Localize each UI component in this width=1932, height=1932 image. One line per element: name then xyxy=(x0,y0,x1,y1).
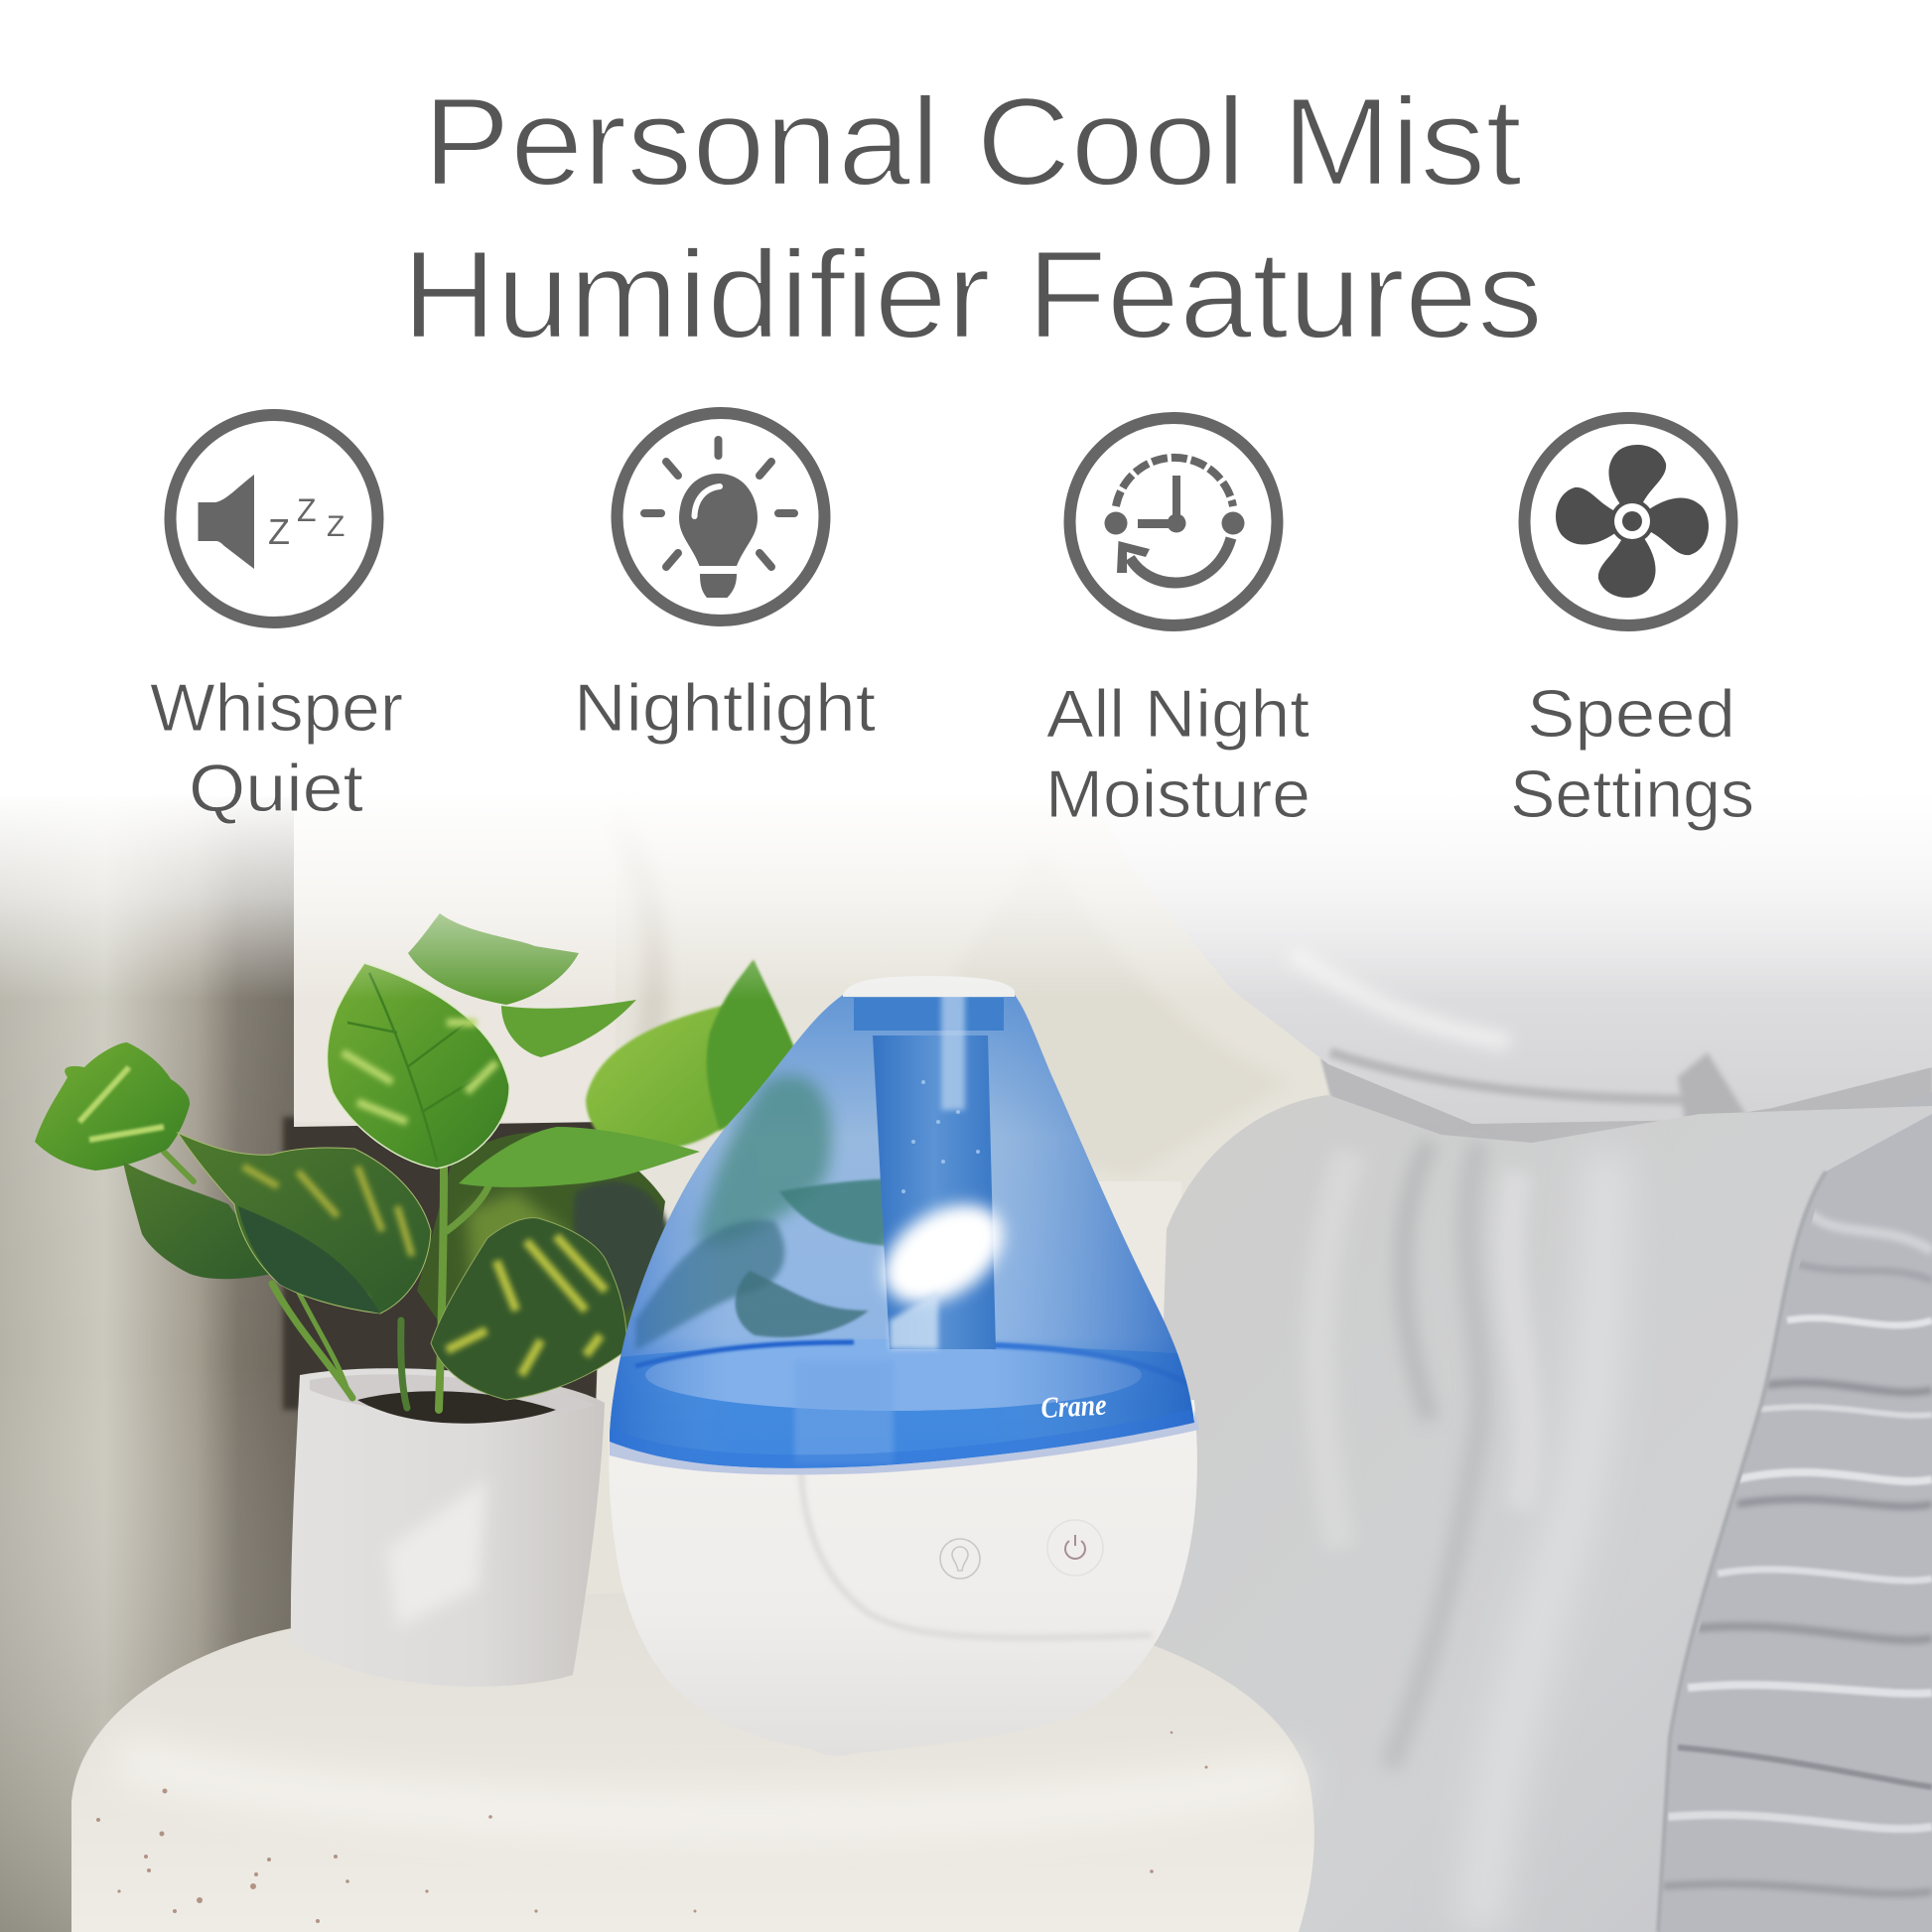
photo: bedside scene xyxy=(0,796,1932,1932)
title xyxy=(402,71,1543,364)
icon: speaker with zzz xyxy=(171,415,377,622)
leaf: bottom right variegated xyxy=(431,1218,626,1400)
dark leaf mass xyxy=(417,1132,665,1390)
tube xyxy=(873,1035,996,1349)
feature: whisper quiet xyxy=(150,415,403,826)
side shading xyxy=(610,1021,1194,1449)
leaf: mid bright horizontal xyxy=(459,1127,700,1187)
title: Humidifier Features xyxy=(402,224,1543,364)
leaf: back bright right xyxy=(586,960,794,1151)
nightlight button xyxy=(940,1539,980,1579)
blue tank xyxy=(596,991,1201,1474)
band at tank base xyxy=(606,1408,1196,1468)
droplets xyxy=(901,1080,980,1193)
label: speed settings: Speed xyxy=(1527,676,1735,752)
label: all night moisture: All Night xyxy=(1046,676,1310,752)
feature: all night moisture xyxy=(1045,418,1311,832)
white base xyxy=(609,1400,1197,1756)
blurred back leaf xyxy=(573,1181,675,1320)
feature: nightlight xyxy=(574,413,876,746)
leaf: middle narrow xyxy=(501,1000,636,1057)
power button xyxy=(1047,1520,1103,1576)
platform xyxy=(645,1339,1142,1411)
label: all night moisture xyxy=(1045,676,1311,832)
cream pillow behind xyxy=(294,796,1390,1688)
photo backing xyxy=(0,796,1932,1932)
grey duvet xyxy=(1152,1095,1932,1932)
wall xyxy=(0,796,298,1932)
tube flange xyxy=(854,998,1004,1031)
leaf: big top centre xyxy=(328,963,509,1169)
label: speed settings xyxy=(1510,676,1754,832)
mottled centre foliage xyxy=(467,1191,586,1340)
top cap xyxy=(843,976,1015,997)
stool xyxy=(71,1590,1314,1932)
crease shadow between pillow and duvet xyxy=(1320,1042,1932,1172)
title: Personal Cool Mist xyxy=(423,71,1522,211)
grey pillow xyxy=(1092,796,1932,1137)
highlights big leaf xyxy=(343,1023,496,1122)
inner fold dark leaf xyxy=(238,1206,380,1313)
plant reflections xyxy=(695,1075,832,1246)
humidifier xyxy=(609,976,1199,1693)
icon: light bulb xyxy=(618,413,824,621)
speckles on stool xyxy=(96,1731,1207,1923)
clear rim band xyxy=(610,1410,1199,1474)
label: whisper quiet xyxy=(150,670,403,826)
label: nightlight: Nightlight xyxy=(574,670,876,746)
leaf: far left bright xyxy=(35,1042,190,1171)
tube base glow xyxy=(890,1291,938,1349)
blotches dark leaf xyxy=(243,1167,412,1301)
white glow xyxy=(874,1191,1013,1312)
leaf: dark variegated left xyxy=(178,1133,431,1313)
icon: fan xyxy=(1525,418,1731,625)
label: whisper quiet: Quiet xyxy=(189,751,363,826)
icon: speaker with zzz: Z xyxy=(268,511,290,552)
quilt xyxy=(1628,1092,1932,1932)
label: speed settings: Settings xyxy=(1510,757,1754,832)
label: whisper quiet: Whisper xyxy=(150,670,403,746)
dark gap behind the plant xyxy=(283,1117,601,1410)
white fade over photo xyxy=(0,796,1932,1000)
base swoosh xyxy=(801,1466,1152,1638)
veins big leaf xyxy=(347,973,486,1162)
icon: speaker with zzz: Z xyxy=(297,492,317,528)
highlight strip xyxy=(941,991,965,1110)
blotches lower leaf xyxy=(447,1236,606,1375)
leaf: top small xyxy=(408,913,579,1005)
icon: clock with cycle arrow xyxy=(1070,418,1277,625)
label: all night moisture: Moisture xyxy=(1045,757,1311,832)
icon: speaker with zzz: Z xyxy=(327,510,345,543)
flower pot xyxy=(291,1368,605,1687)
plant xyxy=(35,913,794,1410)
highlights far left leaf xyxy=(79,1067,164,1140)
leaf: back right fold xyxy=(707,960,794,1130)
stems xyxy=(164,1152,488,1410)
brand: Crane xyxy=(1040,1389,1107,1425)
water xyxy=(596,1344,1201,1469)
leaf: far-left dark xyxy=(123,1162,272,1279)
feature: speed settings xyxy=(1510,418,1754,832)
